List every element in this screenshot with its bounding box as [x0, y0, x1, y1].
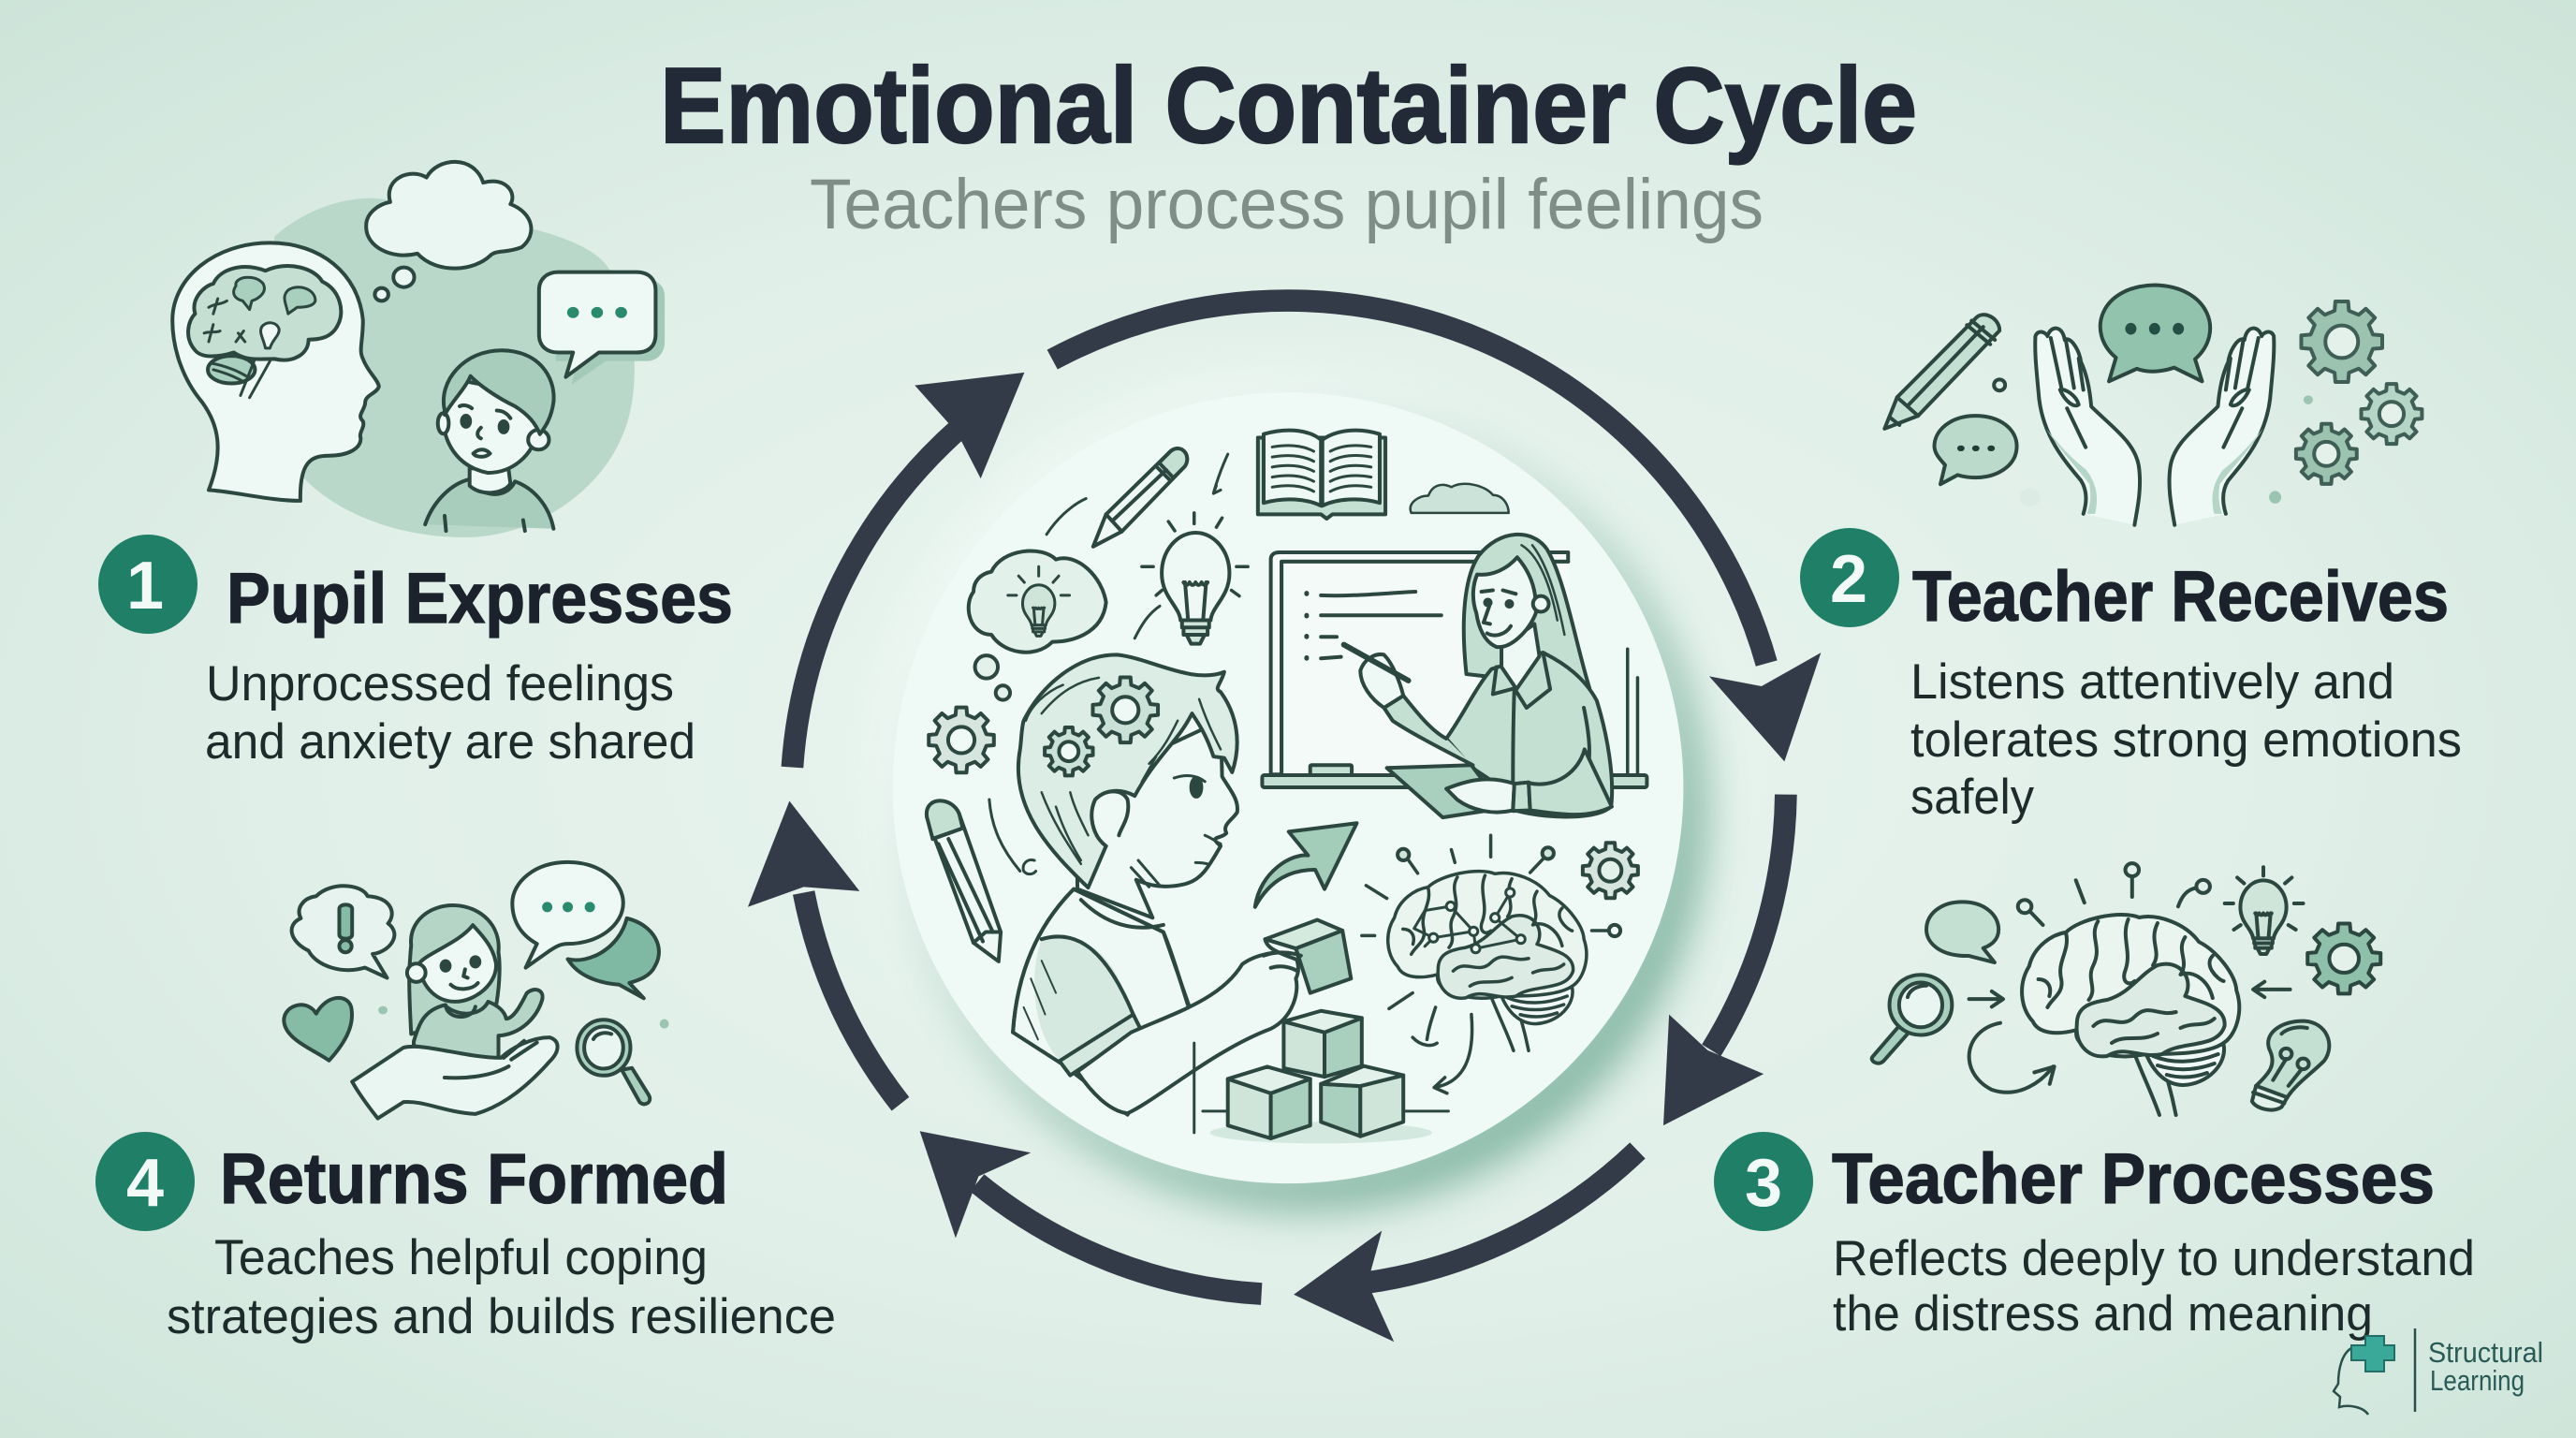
large brain [2022, 915, 2239, 1115]
step 2 description [1910, 654, 2462, 825]
teacher face [1473, 557, 1536, 647]
boy arm and hand [1077, 951, 1298, 1113]
teacher hand on tablet [1446, 779, 1515, 813]
central circle [876, 376, 1706, 1211]
stacked blocks [1194, 1011, 1448, 1143]
panel 3: teacher processes [1714, 863, 2475, 1342]
illustration: brain with ideas [1872, 863, 2380, 1115]
tablet [1387, 765, 1503, 817]
boy ear [1091, 791, 1128, 846]
step 4 description: Teaches helpful coping [214, 1230, 708, 1285]
girl [407, 905, 543, 1060]
panel 2: teacher receives [1800, 286, 2462, 825]
step 2 description: tolerates strong emotions [1910, 712, 2462, 768]
step 2 badge [1800, 528, 1899, 627]
step 2 badge: 2 [1830, 542, 1867, 617]
step 1 description: and anxiety are shared [205, 714, 695, 770]
step 3 description: Reflects deeply to understand [1833, 1231, 2475, 1286]
icon: gear left [929, 708, 994, 772]
step 1 badge [98, 535, 198, 634]
cycle arrow: top to right [1052, 301, 1821, 761]
green arrow [1255, 823, 1356, 907]
teacher hair [1464, 535, 1589, 688]
logo cross [2351, 1336, 2394, 1372]
small speech bubble [1935, 416, 2017, 484]
speech bubble [1926, 902, 1998, 962]
step 3 heading: Teacher Processes [1832, 1139, 2435, 1219]
teacher arm [1384, 696, 1472, 765]
speech bubble [512, 862, 659, 998]
whiteboard [1262, 552, 1647, 787]
teacher hand and pen [1360, 654, 1403, 708]
logo wordmark: Learning [2430, 1364, 2525, 1397]
illustration: receiving hands [1884, 286, 2422, 525]
step 4 description [167, 1230, 836, 1344]
icon: pencil left [927, 800, 1001, 961]
illustration: boy [1013, 654, 1448, 1143]
boy head gears [1092, 678, 1158, 742]
icon: light bulb [1142, 513, 1248, 644]
icon: cloud [1411, 484, 1509, 513]
step 3 description [1833, 1231, 2475, 1342]
idea pins [2030, 876, 2196, 925]
subtitle: Teachers process pupil feelings [810, 165, 1764, 244]
pupil [425, 350, 554, 531]
logo head outline [2334, 1348, 2368, 1415]
panel 1: pupil expresses [98, 162, 733, 770]
boy eye [1131, 776, 1221, 887]
step 3 badge [1714, 1132, 1813, 1231]
step 4 badge: 4 [126, 1146, 164, 1221]
held block [1264, 920, 1351, 993]
logo: structural learning [2334, 1328, 2543, 1415]
magnifier [577, 1020, 650, 1104]
title: Emotional Container Cycle [660, 47, 1917, 166]
right hand [2170, 329, 2274, 525]
boy face [1077, 721, 1237, 917]
magnifier [1872, 975, 1952, 1064]
dots [1994, 379, 2005, 390]
cycle arrow: bottom right [1294, 1151, 1637, 1342]
step 2 heading: Teacher Receives [1912, 557, 2449, 637]
logo divider [2414, 1328, 2416, 1412]
teacher neck [1501, 624, 1540, 689]
illustration: pupil and head [172, 162, 665, 537]
cycle arrow: left [748, 801, 900, 1104]
icon: thought cloud with bulb [969, 551, 1106, 700]
boy shirt [1013, 889, 1192, 1115]
illustration: learning scene [927, 431, 1647, 1143]
step 1 description: Unprocessed feelings [206, 656, 674, 712]
gear [2307, 923, 2380, 993]
exclamation cloud [292, 886, 394, 977]
cycle arrow: bottom left [920, 1131, 1262, 1294]
central cycle diagram [748, 301, 1821, 1342]
step 1 heading: Pupil Expresses [227, 559, 733, 638]
head profile [172, 242, 379, 501]
gears [2020, 301, 2422, 506]
icon: open book [1258, 431, 1385, 519]
process arrows [1969, 982, 2291, 1093]
illustration: small brain [1362, 835, 1638, 1093]
icon: pencil top [1093, 448, 1187, 547]
dots [378, 1006, 388, 1014]
cycle arrow: right [1663, 795, 1786, 1125]
logo wordmark: Structural [2428, 1336, 2543, 1369]
speech bubble [539, 272, 665, 385]
small curl [1023, 860, 1036, 874]
illustration: teacher at board [1262, 535, 1647, 817]
open hand [352, 1037, 558, 1119]
teacher body [1446, 653, 1612, 816]
small bulb [2225, 867, 2304, 954]
pencil [1884, 315, 1999, 429]
step 2 description: safely [1910, 770, 2034, 825]
thought cloud [366, 162, 531, 269]
logo wordmark [2428, 1336, 2543, 1397]
large tilted bulb [2252, 1021, 2329, 1109]
boy hair [1018, 654, 1237, 888]
step 1 badge: 1 [126, 549, 164, 624]
left hand [2035, 329, 2140, 525]
step 3 description: the distress and meaning [1833, 1286, 2373, 1342]
large speech bubble [2100, 286, 2210, 381]
heart [284, 998, 352, 1061]
step 3 badge: 3 [1745, 1146, 1782, 1221]
brain in head [188, 266, 341, 398]
step 4 description: strategies and builds resilience [167, 1289, 836, 1344]
icon: gear right [1583, 843, 1638, 898]
cycle arrow: top left [792, 373, 1024, 768]
step 1 description [205, 656, 695, 770]
green blob [273, 198, 635, 537]
step 2 description: Listens attentively and [1910, 654, 2394, 710]
step 4 badge [95, 1132, 195, 1231]
panel 4: returns formed [95, 862, 836, 1344]
step 4 heading: Returns Formed [220, 1139, 728, 1219]
illustration: girl in hand [284, 862, 669, 1119]
strokes [989, 454, 1228, 872]
